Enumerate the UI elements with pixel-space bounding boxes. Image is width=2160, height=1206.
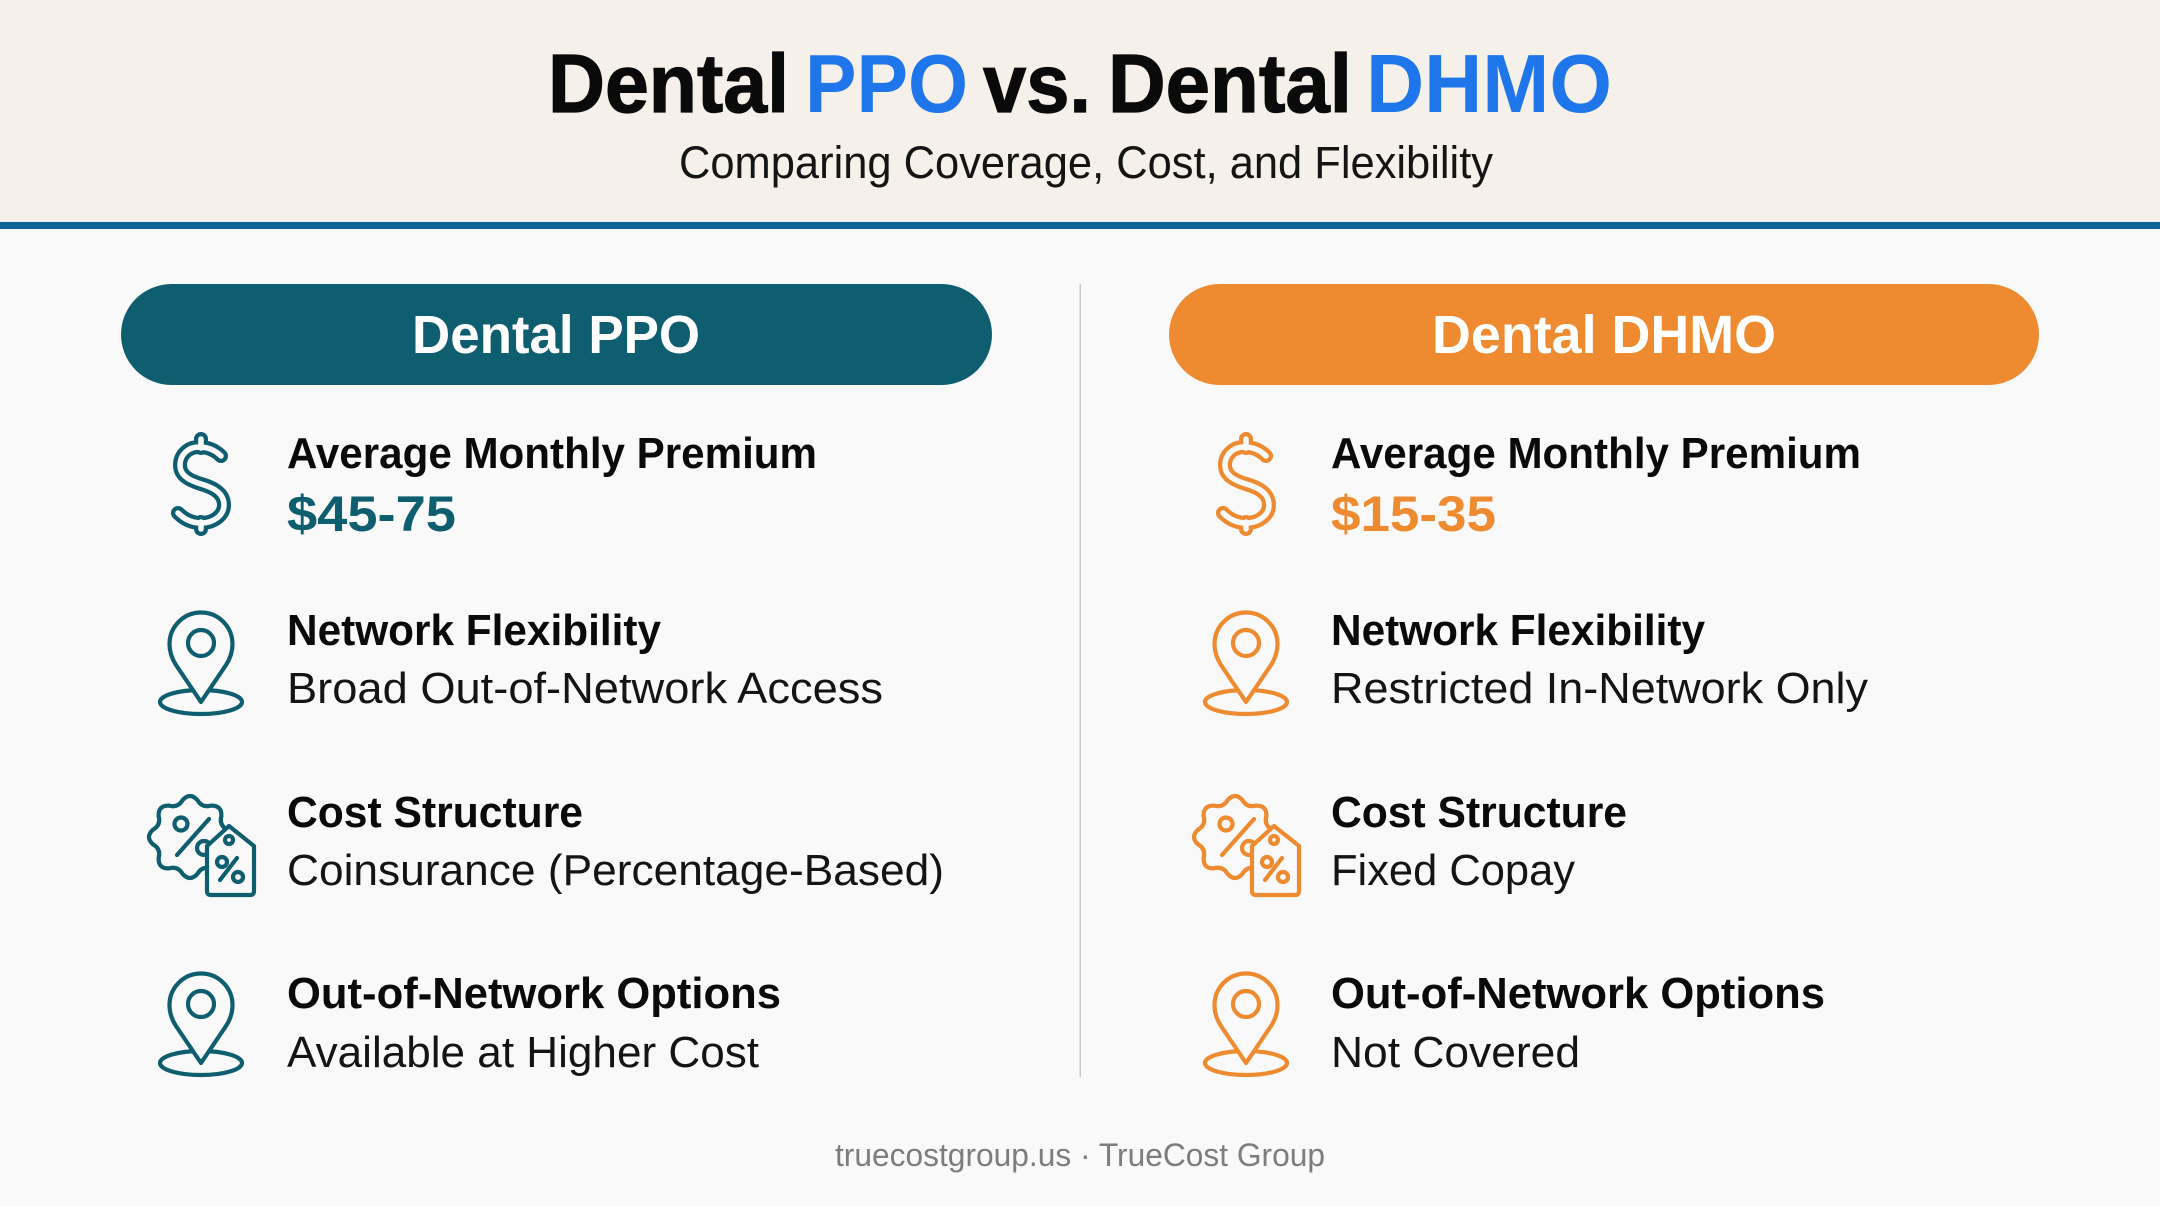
text: average monthly premium: Average Monthly Premium — [1331, 429, 1861, 478]
pill heading: Dental DHMO — [1169, 284, 2039, 385]
title: Dental — [548, 37, 789, 130]
text: network flexibility: Restricted In-Network Only — [1331, 664, 1868, 713]
title — [548, 37, 1612, 130]
center divider — [1080, 284, 1081, 1077]
pill heading: Dental PPO: Dental PPO — [412, 305, 700, 365]
text: average monthly premium: Average Monthly Premium — [287, 429, 817, 478]
text: network flexibility: Network Flexibility — [287, 606, 662, 655]
text: out-of-network options — [1331, 969, 1825, 1077]
footer source: truecostgroup.us · TrueCost Group — [835, 1137, 1325, 1173]
text: out-of-network options: Available at Higher Cost — [287, 1028, 759, 1077]
icon: percent badge and tag — [149, 796, 254, 895]
icon: location pin — [1205, 974, 1287, 1075]
text: out-of-network options — [287, 969, 781, 1077]
text: network flexibility — [1331, 606, 1868, 713]
text: network flexibility: Network Flexibility — [1331, 606, 1706, 655]
text: cost structure: Cost Structure — [287, 788, 583, 837]
icon: location pin — [160, 974, 242, 1075]
icon: location pin — [160, 613, 242, 714]
text: cost structure: Coinsurance (Percentage-Based) — [287, 846, 944, 895]
icon: location pin — [1205, 613, 1287, 714]
title: DHMO — [1366, 37, 1612, 130]
text: average monthly premium — [287, 429, 817, 542]
text: out-of-network options: Out-of-Network Options — [1331, 969, 1825, 1018]
header band — [0, 0, 2160, 229]
text: out-of-network options: Out-of-Network Options — [287, 969, 781, 1018]
panel: Dental PPO — [121, 284, 992, 1077]
subtitle: Comparing Coverage, Cost, and Flexibility — [679, 137, 1493, 188]
text: network flexibility: Broad Out-of-Network Access — [287, 664, 883, 713]
pill heading: Dental DHMO: Dental DHMO — [1432, 305, 1776, 365]
icon: dollar sign — [178, 439, 224, 529]
pill heading: Dental PPO — [121, 284, 992, 385]
title: PPO — [805, 37, 968, 130]
text: cost structure — [287, 788, 944, 895]
icon: dollar sign — [1223, 439, 1269, 529]
text: cost structure — [1331, 788, 1627, 895]
title: vs. — [983, 37, 1091, 130]
panel: Dental DHMO — [1169, 284, 2039, 1077]
text: cost structure: Cost Structure — [1331, 788, 1627, 837]
text: average monthly premium: $15-35 — [1331, 486, 1496, 542]
title: Dental — [1108, 37, 1352, 130]
text: average monthly premium: $45-75 — [287, 486, 456, 542]
text: network flexibility — [287, 606, 883, 713]
icon: percent badge and tag — [1194, 796, 1299, 895]
text: cost structure: Fixed Copay — [1331, 846, 1575, 895]
text: average monthly premium — [1331, 429, 1861, 542]
text: out-of-network options: Not Covered — [1331, 1028, 1580, 1077]
